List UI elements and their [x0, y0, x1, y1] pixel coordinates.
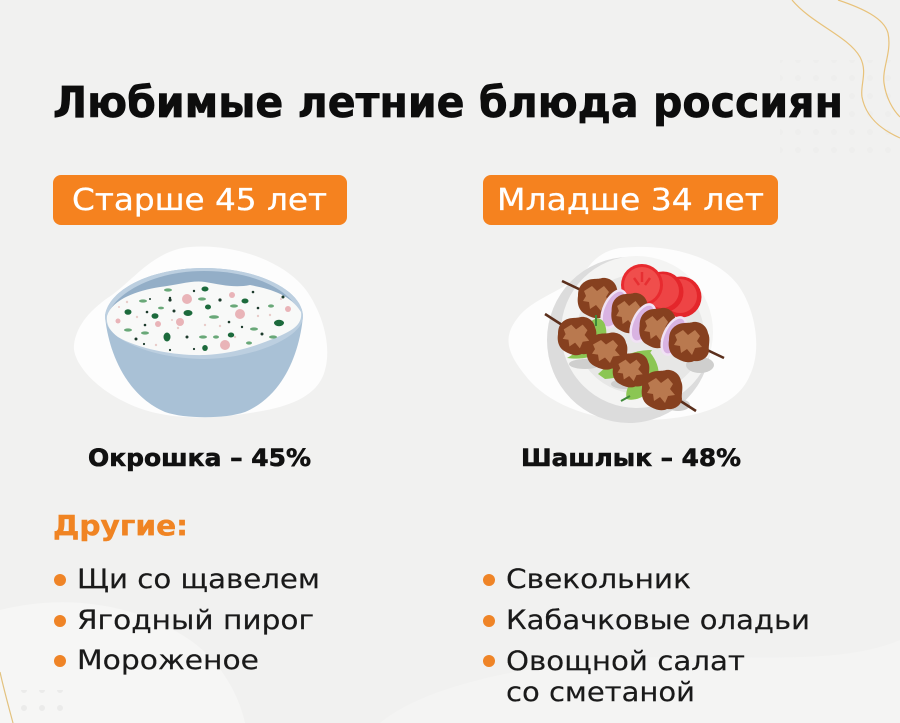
panel: older than 45 [53, 175, 347, 472]
shadows on plate [569, 357, 714, 411]
item: vegetable salad [483, 646, 745, 708]
skewers [545, 281, 724, 411]
label: okroshka: Окрошка – 45% [88, 444, 311, 472]
item: berry pie: Ягодный пирог [77, 605, 314, 636]
top skewer food [578, 278, 709, 362]
badge: younger than 34: Младше 34 лет [497, 183, 764, 218]
label: shashlik: Шашлык – 48% [521, 444, 741, 472]
item: ice cream: Мороженое [77, 645, 259, 676]
lower skewer food [558, 315, 682, 410]
item: zucchini fritters: Кабачковые оладьи [506, 605, 810, 636]
list: younger group [483, 564, 810, 708]
illustration: okroshka bowl [74, 246, 327, 417]
badge: older than 45 [53, 175, 347, 225]
illustration: shashlik plate [509, 247, 756, 423]
badge: younger than 34 [483, 175, 778, 225]
badge: older than 45: Старше 45 лет [72, 183, 327, 218]
item: vegetable salad: Овощной салат [506, 646, 745, 677]
item: vegetable salad: со сметаной [506, 677, 695, 708]
list: older group [54, 564, 320, 676]
heading: others: Другие: [53, 509, 188, 542]
panel: younger than 34 [483, 175, 778, 472]
item: beet soup: Свекольник [506, 564, 691, 595]
item: shchi: Щи со щавелем [77, 564, 320, 595]
title: Любимые летние блюда россиян [53, 78, 843, 128]
tomatoes [621, 264, 702, 318]
